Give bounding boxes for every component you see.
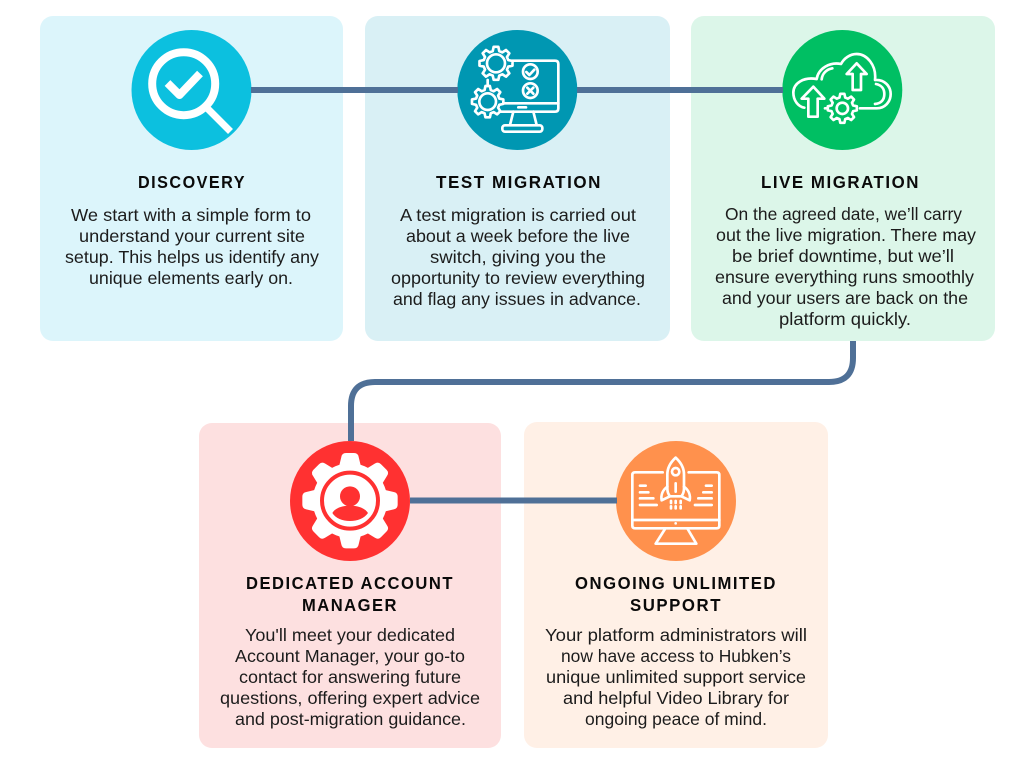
text: discovery description: We start with a simple form to (71, 205, 311, 225)
icon: magnifier with check (132, 30, 252, 150)
panel: test migration (365, 16, 670, 341)
text: discovery description: unique elements early on. (89, 268, 293, 288)
panel: ongoing unlimited support (524, 422, 828, 748)
text: account manager description: and post-migration guidance. (235, 709, 466, 729)
panel: dedicated account manager (199, 423, 501, 748)
panel: live migration (691, 16, 995, 341)
connector: live migration to account manager (351, 341, 853, 441)
text: test migration description: about a week before the live (406, 226, 630, 246)
panel: discovery (40, 16, 343, 341)
icon: cloud with arrows and gear (782, 30, 902, 150)
heading: ongoing unlimited support: ONGOING UNLIMITED (575, 573, 777, 593)
text: discovery description: setup. This helps us identify any (65, 247, 319, 267)
text: account manager description: You'll meet your dedicated (245, 625, 455, 645)
text: ongoing support description: now have access to Hubken’s (561, 646, 791, 666)
text: test migration description: switch, giving you the (430, 247, 606, 267)
heading: live migration: LIVE MIGRATION (761, 172, 920, 192)
text: discovery description (65, 205, 319, 288)
text: discovery description: understand your current site (79, 226, 305, 246)
text: account manager description: Account Manager, your go-to (235, 646, 465, 666)
heading: ongoing unlimited support: SUPPORT (630, 595, 722, 615)
text: test migration description: opportunity to review everything (391, 268, 645, 288)
text: live migration description: ensure everything runs smoothly (715, 267, 974, 287)
text: ongoing support description: ongoing peace of mind. (585, 709, 767, 729)
text: live migration description: out the live migration. There may (716, 225, 976, 245)
text: ongoing support description: unique unlimited support service (546, 667, 806, 687)
text: account manager description: questions, offering expert advice (220, 688, 480, 708)
text: live migration description (715, 204, 976, 329)
icon: monitor with rocket (616, 441, 736, 561)
text: live migration description: On the agreed date, we’ll carry (725, 204, 962, 224)
heading: test migration: TEST MIGRATION (436, 172, 602, 192)
text: test migration description: and flag any issues in advance. (393, 289, 641, 309)
text: ongoing support description: Your platform administrators will (545, 625, 807, 645)
icon: monitor with gears (457, 30, 577, 150)
text: account manager description: contact for answering future (239, 667, 461, 687)
text: account manager description (220, 625, 480, 729)
text: live migration description: and your users are back on the (722, 288, 968, 308)
connector: test migration to live migration (577, 87, 783, 93)
connector: discovery to test migration (251, 87, 458, 93)
text: live migration description: be brief downtime, but we’ll (732, 246, 954, 266)
connector: account manager to ongoing support (410, 498, 617, 504)
text: test migration description: A test migration is carried out (400, 205, 636, 225)
icon: gear with person (290, 441, 410, 561)
heading: ongoing unlimited support (575, 573, 777, 615)
text: ongoing support description: and helpful Video Library for (563, 688, 789, 708)
text: ongoing support description (545, 625, 807, 729)
text: test migration description (391, 205, 645, 309)
heading: dedicated account manager: MANAGER (302, 595, 398, 615)
heading: dedicated account manager: DEDICATED ACCOUNT (246, 573, 454, 593)
text: live migration description: platform quickly. (779, 309, 911, 329)
heading: discovery: DISCOVERY (138, 172, 246, 192)
heading: dedicated account manager (246, 573, 454, 615)
